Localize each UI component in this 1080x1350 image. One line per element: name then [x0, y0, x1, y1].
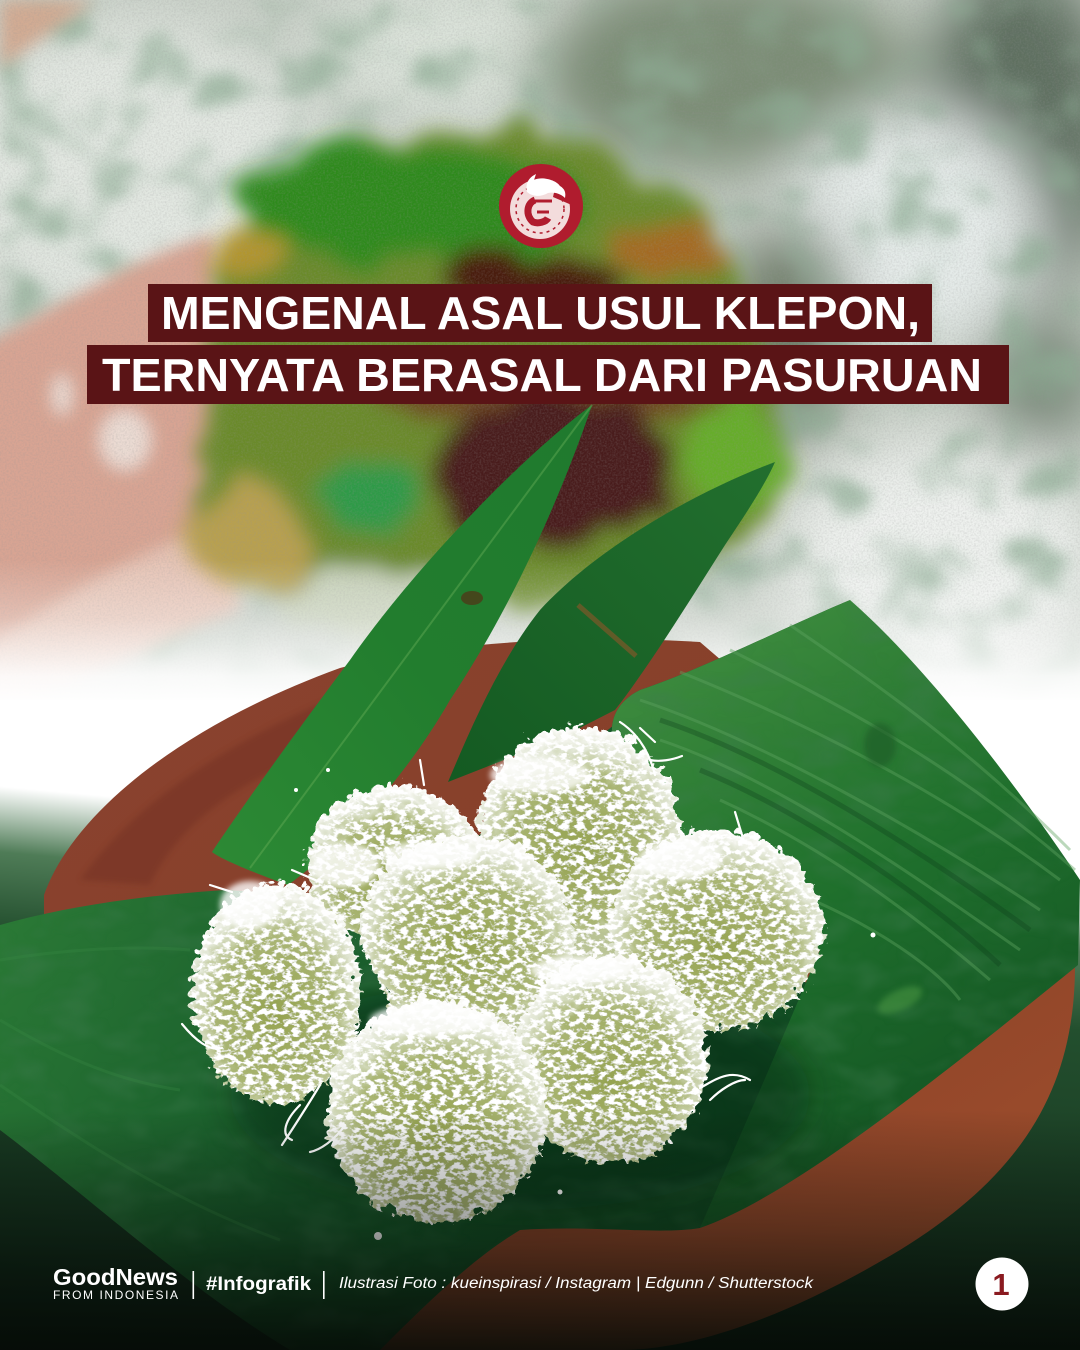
banana leaf — [0, 600, 1080, 1350]
klepon right — [605, 825, 819, 1025]
title — [87, 284, 1009, 404]
title bar 1 — [148, 284, 932, 342]
pink finger — [0, 235, 240, 720]
klepon bottom right — [509, 951, 703, 1159]
tan corner — [0, 0, 95, 68]
photo credit: Ilustrasi Foto : kueinspirasi / Instagram | Edgunn / Shutterstock — [339, 1275, 814, 1292]
pandan leaf left — [212, 405, 592, 885]
bottom dark overlay — [0, 1110, 1080, 1350]
logo badge — [499, 164, 583, 248]
klepon bottom center — [322, 995, 542, 1217]
brand: GoodNews from Indonesia: GoodNews — [53, 1264, 178, 1290]
green mottling in coconut — [0, 0, 1080, 720]
footer — [53, 1264, 814, 1302]
lower background gradient — [0, 700, 1080, 1350]
brand: GoodNews from Indonesia: FROM INDONESIA — [53, 1288, 178, 1302]
coconut strands — [182, 722, 750, 1224]
title bar 2 — [87, 345, 1009, 404]
klepon center — [356, 830, 570, 1020]
title line 1: MENGENAL ASAL USUL KLEPON, — [161, 287, 920, 339]
klepon left — [188, 878, 356, 1098]
klepon top — [474, 722, 676, 928]
fade to white — [0, 560, 1080, 705]
hashtag: #Infografik — [206, 1274, 311, 1295]
page number badge — [976, 1258, 1028, 1310]
blurred background photo of klepon — [0, 0, 1080, 720]
pandan leaf right — [448, 462, 775, 782]
brand: GoodNews from Indonesia — [53, 1264, 178, 1302]
snowy highlights — [220, 757, 722, 1036]
klepon balls — [182, 722, 876, 1240]
grain — [0, 0, 1080, 640]
terracotta plate — [44, 639, 1075, 1350]
filler between klepon — [375, 860, 625, 1060]
klepon cross section — [188, 122, 790, 641]
page number badge: 1 — [992, 1267, 1010, 1302]
title line 2: TERNYATA BERASAL DARI PASURUAN — [102, 349, 982, 401]
coconut crumbs — [294, 768, 876, 1240]
klepon back left — [302, 780, 478, 940]
shadow below klepon — [230, 980, 810, 1210]
